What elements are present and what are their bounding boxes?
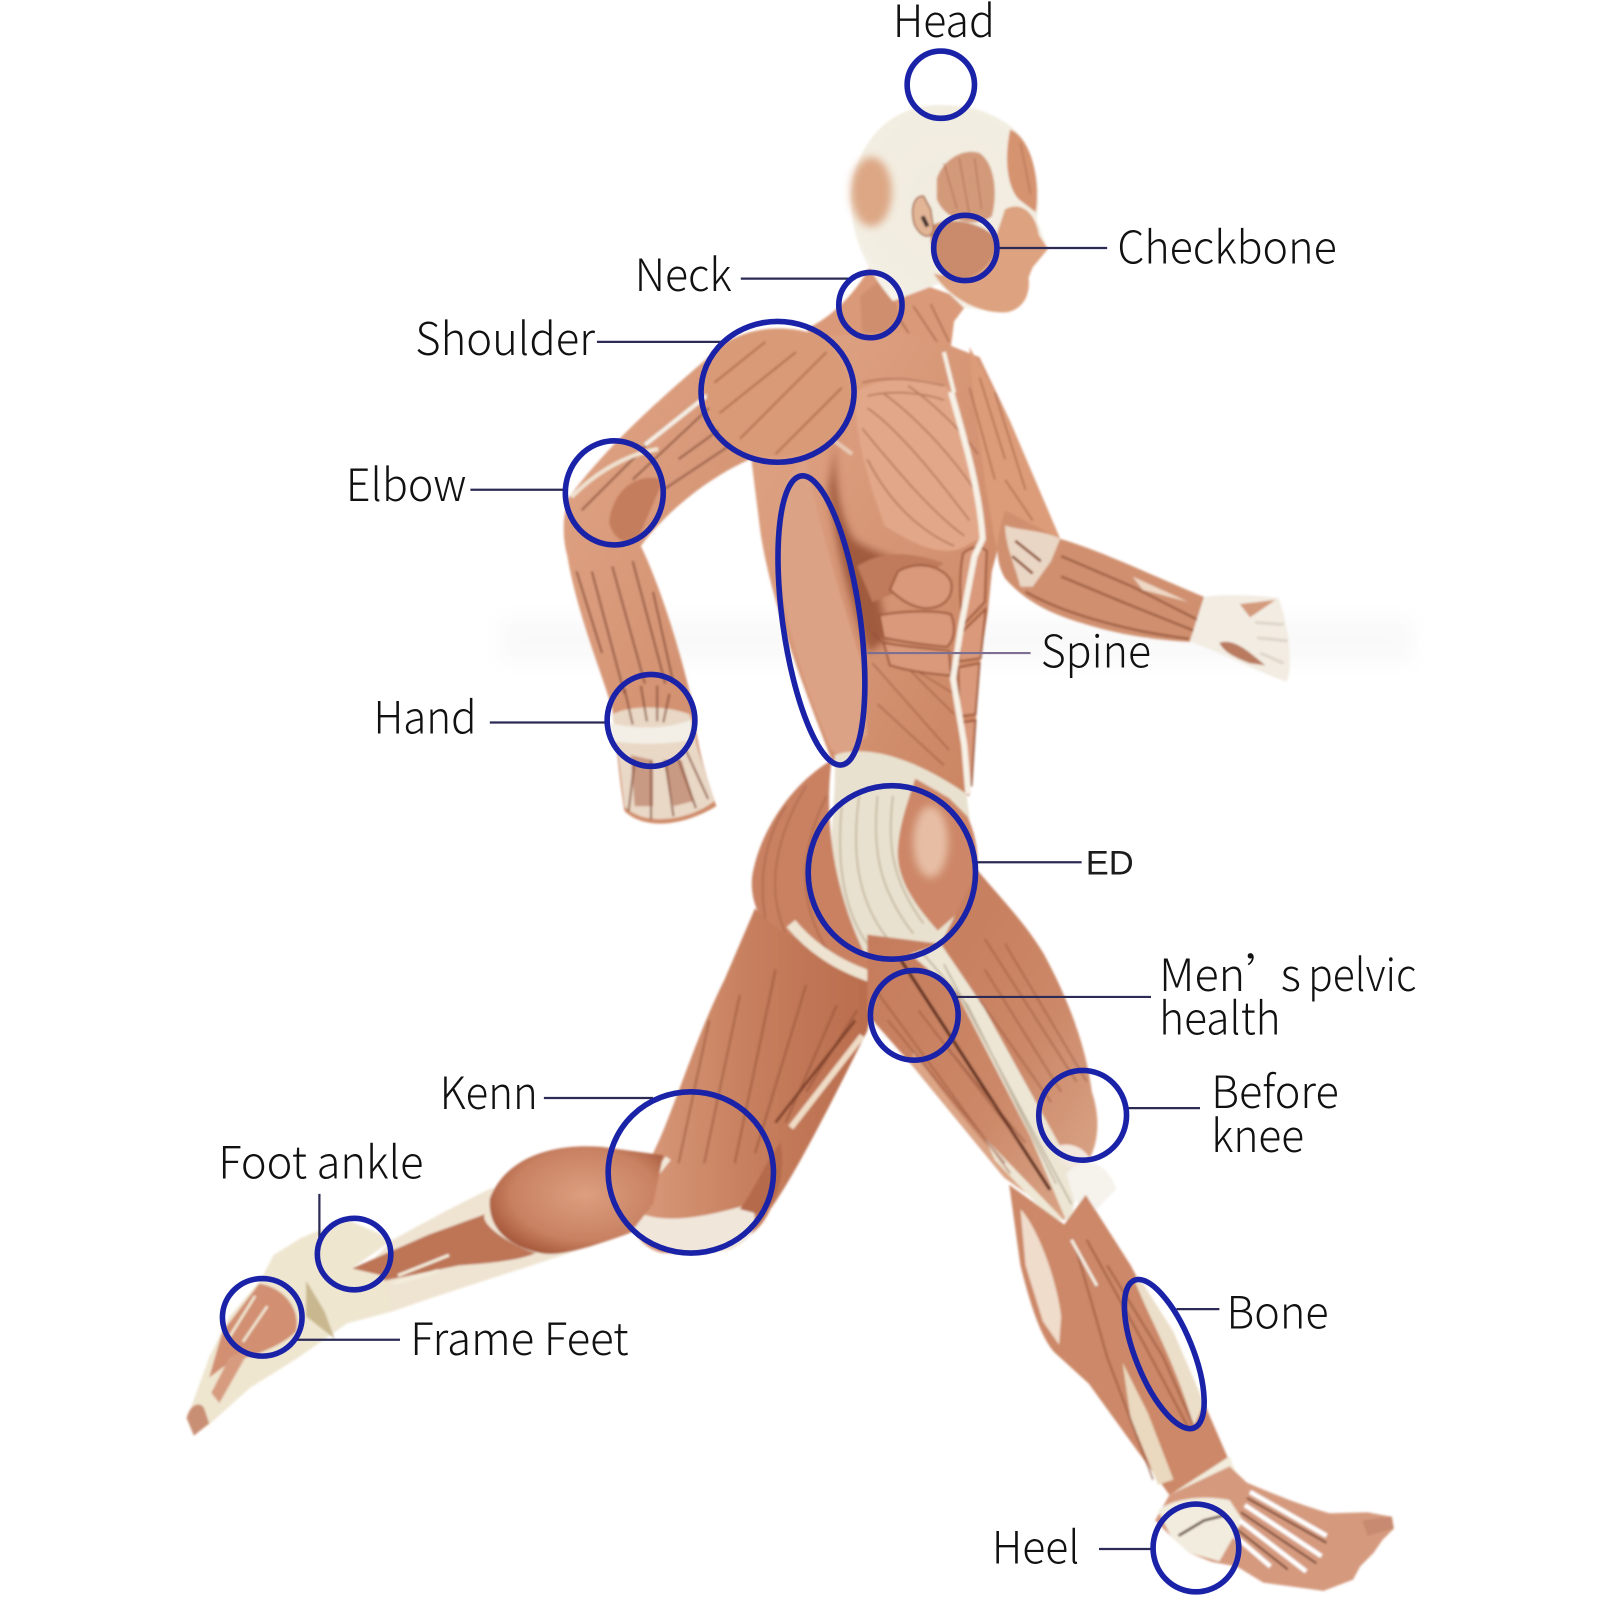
muscular runner figure (187, 105, 1394, 1591)
front thigh (867, 870, 1116, 1231)
pelvis (830, 751, 978, 978)
callout: Foot ankle: Foot ankle (218, 1127, 423, 1192)
abdominal muscles (880, 547, 987, 786)
callout: Spine (763, 471, 1151, 770)
callout: Men's pelvic health: Men’ (1159, 939, 1290, 1004)
callout: Heel: Heel (992, 1511, 1080, 1576)
front lower leg (1009, 1185, 1237, 1512)
shoulder deltoid (706, 328, 851, 457)
callout: Checkbone: Checkbone (1117, 211, 1337, 276)
callout: ED: ED (1086, 844, 1134, 882)
front hand (1190, 595, 1290, 682)
callout: Men's pelvic health: pelvic (1308, 939, 1416, 1004)
glute fibres (763, 786, 827, 949)
callout: Elbow: Elbow (346, 449, 466, 514)
callout: ED (808, 786, 1134, 959)
head (851, 105, 1048, 312)
callout: Hand (373, 674, 695, 766)
callout: Kenn: Kenn (440, 1057, 538, 1122)
callout: Frame Feet (222, 1279, 629, 1368)
callout: Before knee: Before (1211, 1056, 1339, 1121)
callout: Neck: Neck (635, 239, 732, 304)
callout: Heel (992, 1504, 1239, 1592)
callout: Before knee (1039, 1056, 1339, 1165)
back arm (564, 337, 816, 824)
callout: Men's pelvic health (870, 939, 1416, 1060)
callout: Hand: Hand (373, 682, 477, 747)
rear foot (187, 1219, 393, 1436)
rear calf (352, 1146, 663, 1311)
callout: Men's pelvic health: s (1281, 939, 1301, 1004)
callout: Bone (1108, 1270, 1329, 1439)
neck muscles (806, 267, 969, 388)
callout: Shoulder (415, 303, 854, 462)
deltoid fibres (714, 342, 852, 454)
callout: Kenn (440, 1057, 773, 1253)
glute (752, 760, 878, 978)
callout: Frame Feet: Frame Feet (410, 1303, 629, 1368)
callout: Checkbone (934, 211, 1337, 281)
front arm (997, 510, 1204, 642)
faint reflection band (500, 617, 1413, 663)
callout: Before knee: knee (1211, 1100, 1304, 1165)
callout: Men's pelvic health: health (1159, 983, 1281, 1048)
callout: Head (893, 0, 995, 118)
callout: Elbow (346, 441, 663, 545)
hip highlight (913, 806, 948, 878)
callout: Bone: Bone (1227, 1277, 1329, 1342)
callout: Shoulder: Shoulder (415, 303, 596, 368)
callout: Spine: Spine (1041, 615, 1151, 680)
front foot (1155, 1466, 1394, 1591)
torso (750, 332, 1060, 796)
callout: Neck (635, 239, 902, 338)
pelvis tendon lines (840, 796, 923, 944)
callout: Foot ankle (218, 1127, 423, 1290)
rear thigh and knee (612, 908, 880, 1254)
hip muscle (898, 779, 978, 931)
